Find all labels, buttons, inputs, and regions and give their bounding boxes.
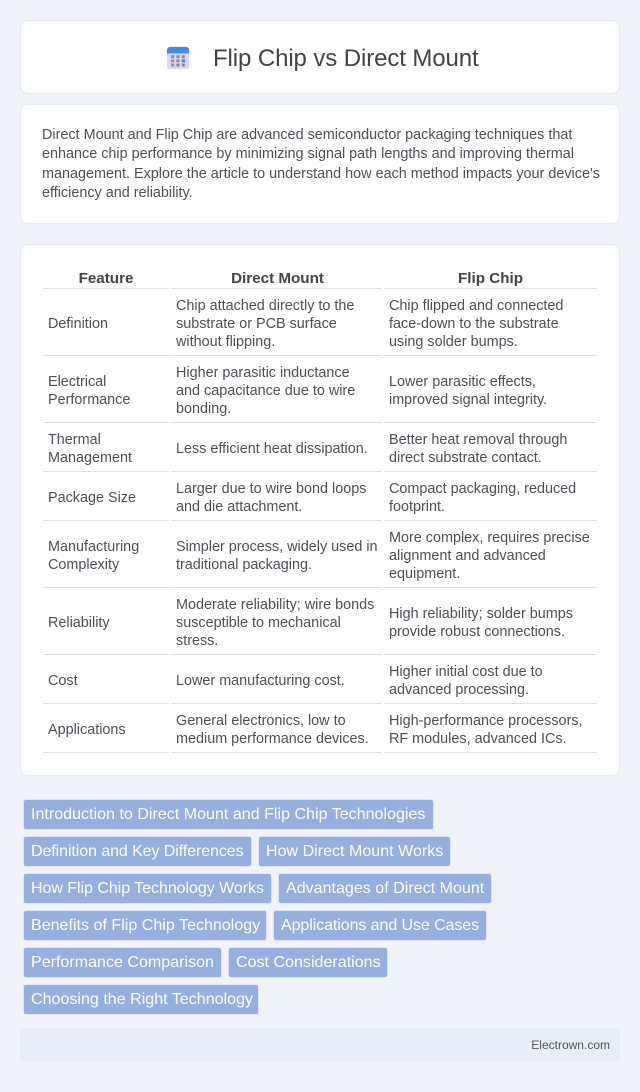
row: Applications, direct mount: General electronics, low to — [176, 713, 346, 729]
row: Package Size, flip chip: Compact packaging, reduced — [389, 481, 576, 497]
row: Reliability, direct mount — [176, 597, 374, 649]
chip: performance comparison — [23, 947, 222, 978]
title text: Flip Chip vs Direct Mount — [213, 45, 479, 72]
row: Cost, direct mount: Lower manufacturing cost. — [176, 673, 345, 689]
intro paragraph: Direct Mount and Flip Chip are advanced semiconductor packaging techniques that — [42, 127, 572, 143]
intro paragraph — [42, 127, 600, 201]
chip: introduction: Introduction to Direct Mount and Flip Chip Technologies — [31, 806, 425, 823]
row: Applications, flip chip — [389, 713, 583, 747]
row: Manufacturing Complexity, direct mount: Simpler process, widely used in — [176, 539, 378, 555]
row: Thermal Management label: Management — [48, 450, 132, 466]
intro text card — [20, 104, 620, 224]
row: Applications label: Applications — [48, 722, 126, 738]
row: Package Size, flip chip: footprint. — [389, 499, 445, 515]
comparison table card — [20, 244, 620, 776]
row: Definition, flip chip: using solder bumps. — [389, 334, 518, 350]
chip: definition: Definition and Key Differences — [31, 843, 244, 860]
row: Manufacturing Complexity, flip chip: equipment. — [389, 566, 460, 582]
row: Definition, direct mount: Chip attached directly to the — [176, 298, 354, 314]
chip: cost considerations — [228, 947, 388, 978]
row: Applications, direct mount — [176, 713, 369, 747]
row: Electrical Performance label: Performance — [48, 392, 130, 408]
chip: how flip chip works — [23, 873, 272, 904]
row: Definition, flip chip: Chip flipped and connected — [389, 298, 563, 314]
row: Electrical Performance, flip chip: improved signal integrity. — [389, 392, 547, 408]
icon: calendar grid — [166, 46, 190, 70]
chip: definition — [23, 836, 252, 867]
row: Electrical Performance, direct mount: and capacitance due to wire — [176, 383, 355, 399]
topic link chips — [23, 799, 492, 1015]
table header: Feature: Feature — [79, 270, 133, 287]
row: Electrical Performance label — [48, 374, 130, 408]
chip: advantages of direct mount: Advantages of Direct Mount — [286, 880, 484, 897]
row: Package Size label: Package Size — [48, 490, 136, 506]
row: Electrical Performance, direct mount: bonding. — [176, 401, 231, 417]
row: Definition, direct mount — [176, 298, 354, 350]
row: Thermal Management label — [48, 432, 132, 466]
chip: how direct mount works — [258, 836, 451, 867]
row: Package Size, direct mount — [176, 481, 366, 515]
row: Reliability, flip chip — [389, 606, 573, 640]
title card — [20, 20, 620, 94]
row: Applications, flip chip: High-performance processors, — [389, 713, 583, 729]
chip: benefits of flip chip — [23, 910, 267, 941]
row: Cost label: Cost — [48, 673, 78, 689]
chip: choosing technology: Choosing the Right Technology — [31, 991, 253, 1008]
row: Electrical Performance, direct mount: Higher parasitic inductance — [176, 365, 350, 381]
row: Manufacturing Complexity label: Manufacturing — [48, 539, 139, 555]
row: Applications, direct mount: medium performance devices. — [176, 731, 369, 747]
row: Package Size, flip chip — [389, 481, 576, 515]
chip: cost considerations: Cost Considerations — [236, 954, 381, 971]
chip: how flip chip works: How Flip Chip Technology Works — [31, 880, 264, 897]
chip: applications — [273, 910, 487, 941]
row: Manufacturing Complexity, flip chip: alignment and advanced — [389, 548, 546, 564]
row: Definition, direct mount: without flipping. — [176, 334, 275, 350]
row: Manufacturing Complexity label: Complexity — [48, 557, 119, 573]
row: Cost, flip chip: advanced processing. — [389, 682, 529, 698]
row: Reliability, flip chip: provide robust connections. — [389, 624, 565, 640]
chip: choosing technology — [23, 984, 259, 1015]
row: Definition, flip chip: face-down to the substrate — [389, 316, 559, 332]
row: Electrical Performance label: Electrical — [48, 374, 106, 390]
intro paragraph: enhance chip performance by minimizing signal path lengths and improving thermal — [42, 146, 574, 162]
row: Thermal Management, direct mount: Less efficient heat dissipation. — [176, 441, 368, 457]
row: Definition, flip chip — [389, 298, 563, 350]
row: Definition label: Definition — [48, 316, 108, 332]
row: Manufacturing Complexity, direct mount — [176, 539, 378, 573]
row: Manufacturing Complexity, flip chip: More complex, requires precise — [389, 530, 590, 546]
row: Electrical Performance, direct mount — [176, 365, 355, 417]
row: Definition, direct mount: substrate or PCB surface — [176, 316, 337, 332]
row: Electrical Performance, flip chip: Lower parasitic effects, — [389, 374, 536, 390]
chip: performance comparison: Performance Comparison — [31, 954, 214, 971]
row: Reliability, direct mount: Moderate reliability; wire bonds — [176, 597, 374, 613]
row: Manufacturing Complexity, flip chip — [389, 530, 590, 582]
row: Reliability label: Reliability — [48, 615, 110, 631]
row: Manufacturing Complexity, direct mount: traditional packaging. — [176, 557, 312, 573]
table header: Flip Chip: Flip Chip — [458, 270, 523, 287]
row: Thermal Management, flip chip: Better heat removal through — [389, 432, 567, 448]
row: Cost, flip chip — [389, 664, 543, 698]
row: Reliability, flip chip: High reliability; solder bumps — [389, 606, 573, 622]
row: Package Size, direct mount: and die attachment. — [176, 499, 302, 515]
row: Thermal Management, flip chip: direct substrate contact. — [389, 450, 542, 466]
footer source text: Electrown.com — [531, 1038, 610, 1052]
row: Cost, flip chip: Higher initial cost due to — [389, 664, 543, 680]
chip: advantages of direct mount — [278, 873, 492, 904]
row: Applications, flip chip: RF modules, advanced ICs. — [389, 731, 567, 747]
row: Thermal Management, flip chip — [389, 432, 567, 466]
footer bar — [20, 1028, 620, 1062]
chip: applications: Applications and Use Cases — [281, 917, 479, 934]
row: Package Size, direct mount: Larger due to wire bond loops — [176, 481, 366, 497]
chip: introduction — [23, 799, 434, 830]
chip: benefits of flip chip: Benefits of Flip Chip Technology — [31, 917, 260, 934]
intro paragraph: management. Explore the article to understand how each method impacts your device's — [42, 166, 600, 182]
row: Reliability, direct mount: susceptible to mechanical — [176, 615, 341, 631]
table header: Direct Mount: Direct Mount — [231, 270, 324, 287]
row: Electrical Performance, flip chip — [389, 374, 547, 408]
row: Manufacturing Complexity label — [48, 539, 139, 573]
row: Thermal Management label: Thermal — [48, 432, 101, 448]
row: Reliability, direct mount: stress. — [176, 633, 218, 649]
chip: how direct mount works: How Direct Mount Works — [266, 843, 443, 860]
intro paragraph: efficiency and reliability. — [42, 185, 193, 201]
